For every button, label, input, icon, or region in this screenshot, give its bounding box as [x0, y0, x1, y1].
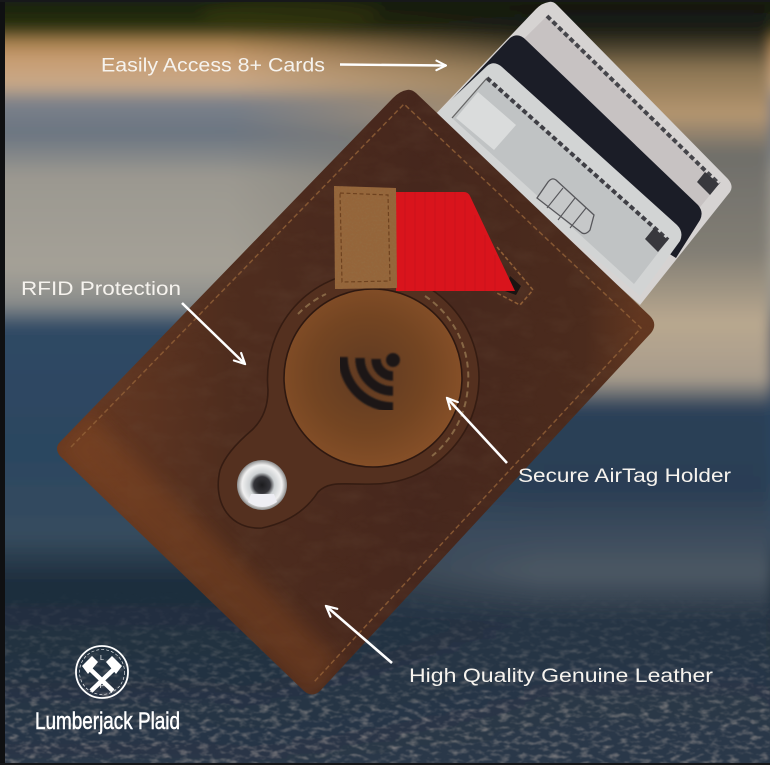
callout: RFID Protection: RFID Protection	[21, 279, 181, 300]
holder stitching	[298, 294, 468, 456]
EMV chip	[537, 179, 594, 234]
arrow: leather	[326, 606, 392, 663]
arrow: cards	[340, 64, 446, 66]
logo: Lumberjack Plaid	[35, 646, 180, 735]
front silver card	[430, 63, 681, 296]
callout: Easily Access 8+ Cards: Easily Access 8+ Cards	[101, 56, 325, 76]
callout: High Quality Genuine Leather: High Quality Genuine Leather	[409, 666, 714, 687]
tan strap patch	[334, 186, 397, 289]
strap slot	[495, 247, 533, 305]
back silver card	[430, 2, 732, 305]
red pull strap	[396, 192, 515, 291]
callout: Secure AirTag Holder	[447, 398, 732, 487]
metal rivet	[237, 460, 287, 510]
icon: crossed axes badge: P	[100, 683, 105, 690]
payment cards fanned out of the wallet	[430, 2, 732, 305]
AirTag holder	[218, 272, 479, 528]
black card	[440, 35, 702, 258]
edge stitching	[71, 104, 641, 682]
arrow: RFID	[182, 303, 245, 364]
logo: Lumberjack Plaid: Lumberjack Plaid	[35, 708, 180, 735]
leather disc	[284, 289, 462, 467]
wireless logo	[343, 353, 400, 407]
arrow: AirTag holder	[447, 398, 507, 463]
wallet body: brown leather	[50, 85, 660, 700]
icon: crossed axes badge: L	[100, 655, 104, 662]
leather panel	[57, 90, 654, 695]
icon: crossed axes badge	[76, 646, 128, 698]
callout: Secure AirTag Holder: Secure AirTag Holder	[518, 466, 732, 487]
callout: RFID Protection	[21, 279, 245, 364]
leather grain	[50, 85, 660, 700]
lower leather sheen	[55, 415, 340, 695]
holder base and tab	[218, 272, 479, 528]
callout: High Quality Genuine Leather	[326, 606, 714, 687]
